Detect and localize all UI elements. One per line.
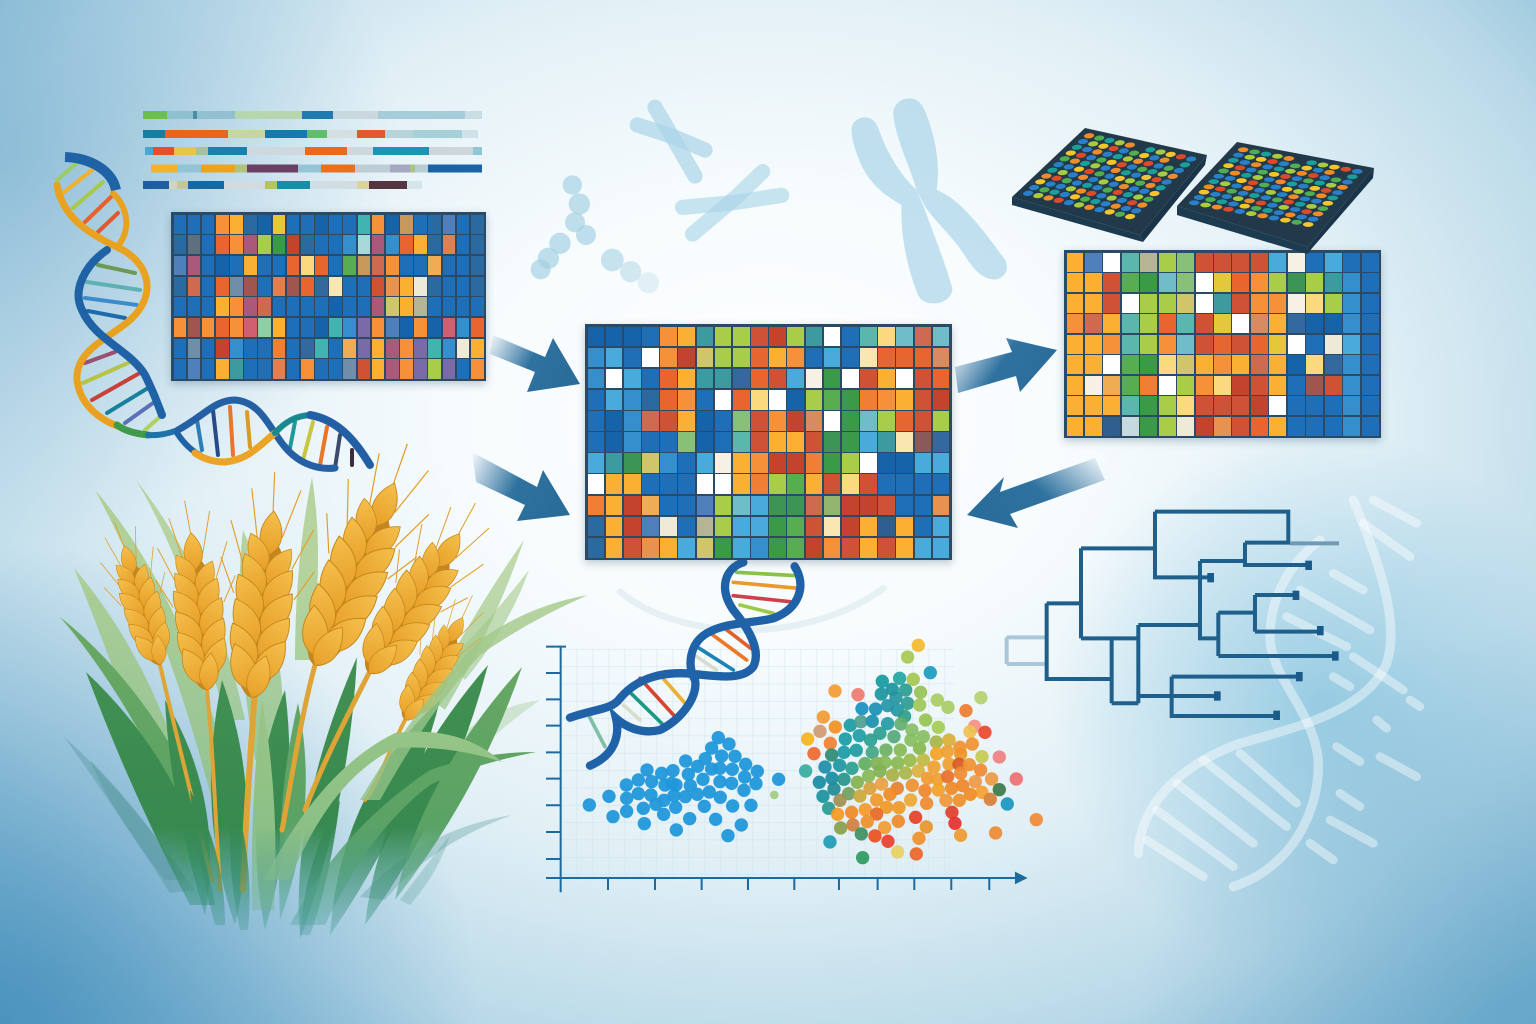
faded root <box>1007 637 1047 664</box>
read 3 <box>145 147 482 155</box>
stems <box>160 665 405 890</box>
DNA helix left <box>57 157 370 468</box>
read 1 <box>143 111 482 119</box>
arrow: top left matrix to central matrix <box>490 335 580 392</box>
leaf terminals <box>1207 561 1339 720</box>
read 2 <box>143 130 478 138</box>
heatmap: top left genotype matrix <box>171 212 486 381</box>
branches <box>1047 512 1337 716</box>
chromosome cluster <box>531 98 1007 303</box>
soft arc behind helix <box>620 588 883 630</box>
read 4 <box>151 164 482 172</box>
heatmap: central integrated matrix <box>585 324 952 560</box>
small chromosome one <box>637 107 705 176</box>
read 5 <box>143 181 422 189</box>
wheat ears <box>87 425 513 736</box>
DNA helix centre <box>570 562 883 766</box>
large chromosome <box>852 98 1007 303</box>
background leaves <box>60 477 540 940</box>
stray point <box>770 791 779 799</box>
base pair rungs <box>57 163 352 468</box>
phylogenetic tree <box>1007 512 1339 720</box>
faded background DNA helix <box>1138 500 1420 887</box>
scatter plot <box>546 639 1043 892</box>
axes <box>546 647 1028 892</box>
small chromosome two <box>683 172 782 234</box>
rungs <box>589 572 798 747</box>
wheat plant <box>60 425 588 940</box>
arrow: right side to central matrix <box>967 458 1105 528</box>
grid <box>561 649 954 876</box>
heatmap: right array matrix <box>1064 250 1381 438</box>
arrow: central matrix to right matrix <box>955 338 1057 393</box>
strands <box>57 157 370 468</box>
mixed colour cluster <box>799 639 1043 864</box>
blue cluster <box>583 731 785 842</box>
microarray chip two <box>1177 142 1374 254</box>
foreground leaves <box>190 595 588 935</box>
microarray chip one <box>1012 128 1207 242</box>
arrow: wheat to central matrix <box>472 452 570 521</box>
sequence reads <box>143 115 482 185</box>
strands <box>570 562 800 766</box>
beaded chromosome <box>531 175 659 293</box>
